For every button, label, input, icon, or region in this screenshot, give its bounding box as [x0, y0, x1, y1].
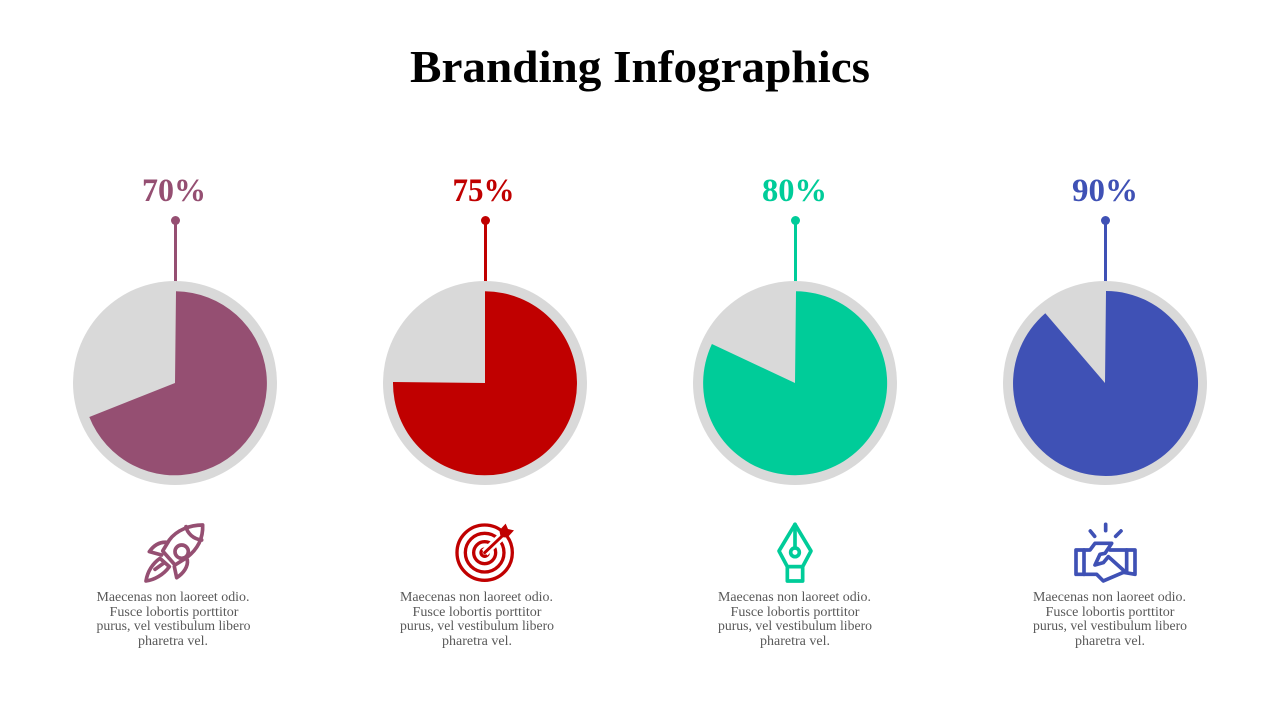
percentage: 75%: 75%: [452, 173, 514, 209]
description: Maecenas non laoreet odio.: [718, 589, 871, 604]
icon: pen nib: [779, 524, 811, 581]
percentage: 70%: 70%: [142, 173, 206, 209]
description: Fusce lobortis porttitor: [110, 604, 239, 619]
description: Fusce lobortis porttitor: [412, 604, 542, 619]
icon: rocket: [146, 525, 203, 581]
description: purus, vel vestibulum libero: [96, 618, 251, 633]
title: Branding Infographics: [410, 41, 870, 92]
description: [718, 589, 872, 648]
description: pharetra vel.: [442, 633, 512, 648]
pointer: 90%: [1101, 216, 1110, 283]
icon: target: [457, 524, 514, 580]
percentage: 80%: 80%: [762, 173, 827, 209]
description: [400, 589, 554, 648]
description: purus, vel vestibulum libero: [400, 618, 554, 633]
icon: handshake: [1076, 524, 1135, 581]
pointer: 70%: [171, 216, 180, 283]
description: pharetra vel.: [138, 633, 208, 648]
pie chart: 90%: [1003, 281, 1207, 485]
description: Maecenas non laoreet odio.: [400, 589, 553, 604]
pointer: 75%: [481, 216, 490, 283]
description: purus, vel vestibulum libero: [718, 618, 872, 633]
percentage: 90%: 90%: [1072, 173, 1138, 209]
description: [96, 589, 251, 648]
pointer: 80%: [791, 216, 800, 283]
pie chart: 75%: [383, 281, 587, 485]
description: pharetra vel.: [760, 633, 830, 648]
pie chart: 80%: [693, 281, 897, 485]
description: Maecenas non laoreet odio.: [96, 589, 250, 604]
description: Fusce lobortis porttitor: [1046, 604, 1175, 619]
description: Fusce lobortis porttitor: [730, 604, 860, 619]
panel: 75%: [383, 173, 587, 648]
panel: 90%: [1003, 173, 1207, 648]
description: Maecenas non laoreet odio.: [1033, 589, 1186, 604]
panel: 80%: [693, 173, 897, 648]
pie chart: 70%: [73, 281, 277, 485]
description: purus, vel vestibulum libero: [1033, 618, 1187, 633]
description: pharetra vel.: [1075, 633, 1145, 648]
panel: 70%: [73, 173, 277, 648]
description: [1033, 589, 1187, 648]
